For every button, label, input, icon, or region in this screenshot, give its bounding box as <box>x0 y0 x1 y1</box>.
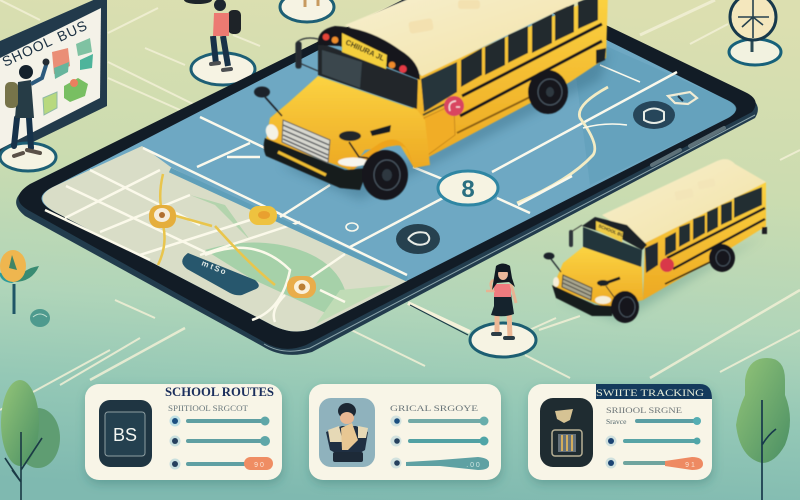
board icons <box>43 38 93 115</box>
panel heading bar: SWIITE TRACKING <box>596 389 704 399</box>
info board: SHOOL BUS <box>0 0 107 158</box>
bus side <box>413 0 608 160</box>
small bus windows <box>665 187 762 256</box>
panel heading: SCHOOL ROUTES <box>165 385 274 399</box>
bus stripes <box>460 24 602 116</box>
screen icon: dark circle lower <box>396 224 440 254</box>
parked vehicle wheel at top edge <box>184 0 212 4</box>
flower decoration <box>0 250 50 327</box>
panel subheading: SPIITIOOL SRGCOT <box>168 404 248 413</box>
map pin: centre <box>249 206 277 225</box>
person with backpack on disc <box>191 0 255 85</box>
panel heading bar <box>596 384 712 399</box>
tablet <box>16 0 758 355</box>
small bus bumper <box>552 285 613 316</box>
screen icon: small badge <box>668 92 697 104</box>
bus destination sign: CHIIURA JL <box>344 38 386 63</box>
person at board <box>0 58 56 171</box>
small bus mirrors <box>544 225 582 272</box>
panel icon: BS: BS <box>113 425 137 445</box>
route rows <box>606 417 703 470</box>
small bus roof <box>602 159 766 243</box>
panel subheading: SRIIOOL SRGNE <box>606 405 682 415</box>
small bus grille <box>562 275 592 300</box>
bus front wheel <box>362 150 408 200</box>
bus rear bumper <box>596 48 606 64</box>
route rows <box>170 416 273 470</box>
bus grille <box>282 120 330 163</box>
panel: tracking: Sravce <box>606 417 627 426</box>
large school bus <box>254 0 608 200</box>
board heading: SHOOL <box>0 32 55 70</box>
small bus shadow <box>560 235 765 322</box>
tablet side buttons <box>652 128 724 165</box>
screen icon: dark circle upper <box>633 101 675 129</box>
small bus hood <box>553 247 643 310</box>
panel: tracking <box>528 384 712 480</box>
bus hood <box>266 76 430 170</box>
route rows: 9 1 <box>685 462 695 469</box>
bus rear wheel <box>528 70 568 114</box>
route marker: 8 <box>438 171 498 205</box>
panel icon: student portrait <box>319 398 375 467</box>
bus upper mirror <box>296 38 318 71</box>
left tree <box>1 380 60 500</box>
small bus sign: SCHOOL BUS <box>598 223 627 239</box>
bus headlights <box>264 122 280 142</box>
panel: student <box>309 384 501 480</box>
map pin: lower right <box>287 276 316 298</box>
stop sign <box>444 96 464 116</box>
map label pill <box>182 253 259 295</box>
tablet screen: blue area <box>42 0 736 332</box>
bus bumper <box>264 138 368 190</box>
bus roof <box>345 0 598 76</box>
small bus side <box>643 182 766 300</box>
small bus stripes <box>667 208 765 269</box>
route rows <box>390 416 489 470</box>
panel icon: BS <box>99 400 152 467</box>
blue screen route lines <box>143 65 677 279</box>
bus windows <box>461 0 598 87</box>
route rows: . 0 0 <box>466 462 480 469</box>
route rows: 9 0 <box>254 462 264 469</box>
person on disc: top partial <box>280 0 334 22</box>
tablet screen: map area <box>42 146 407 332</box>
small school bus <box>544 159 767 323</box>
girl on disc <box>408 264 536 357</box>
right tree <box>736 358 790 500</box>
panel: school routes <box>85 384 282 480</box>
map pin: upper left <box>149 205 176 228</box>
bus shadow <box>280 50 610 200</box>
bus left mirror <box>254 86 282 116</box>
panel icon: device <box>540 398 593 467</box>
bus black cap <box>318 26 420 80</box>
bus vents and mirror <box>370 125 391 136</box>
bus door window <box>421 62 457 112</box>
small bus wheels <box>611 291 639 323</box>
map label pill: m t S o <box>200 259 227 276</box>
info board: SHOOL BUS: BUS <box>55 17 90 45</box>
compass icon on disc <box>729 0 781 65</box>
bus destination sign <box>342 33 387 69</box>
bus windshield <box>318 42 418 109</box>
small stop sign <box>660 258 674 272</box>
route marker: 8: 8 <box>461 176 475 203</box>
small bus windshield <box>583 227 642 267</box>
tablet body <box>16 0 758 355</box>
panel subheading: GRICAL SRGOYE <box>390 403 478 413</box>
